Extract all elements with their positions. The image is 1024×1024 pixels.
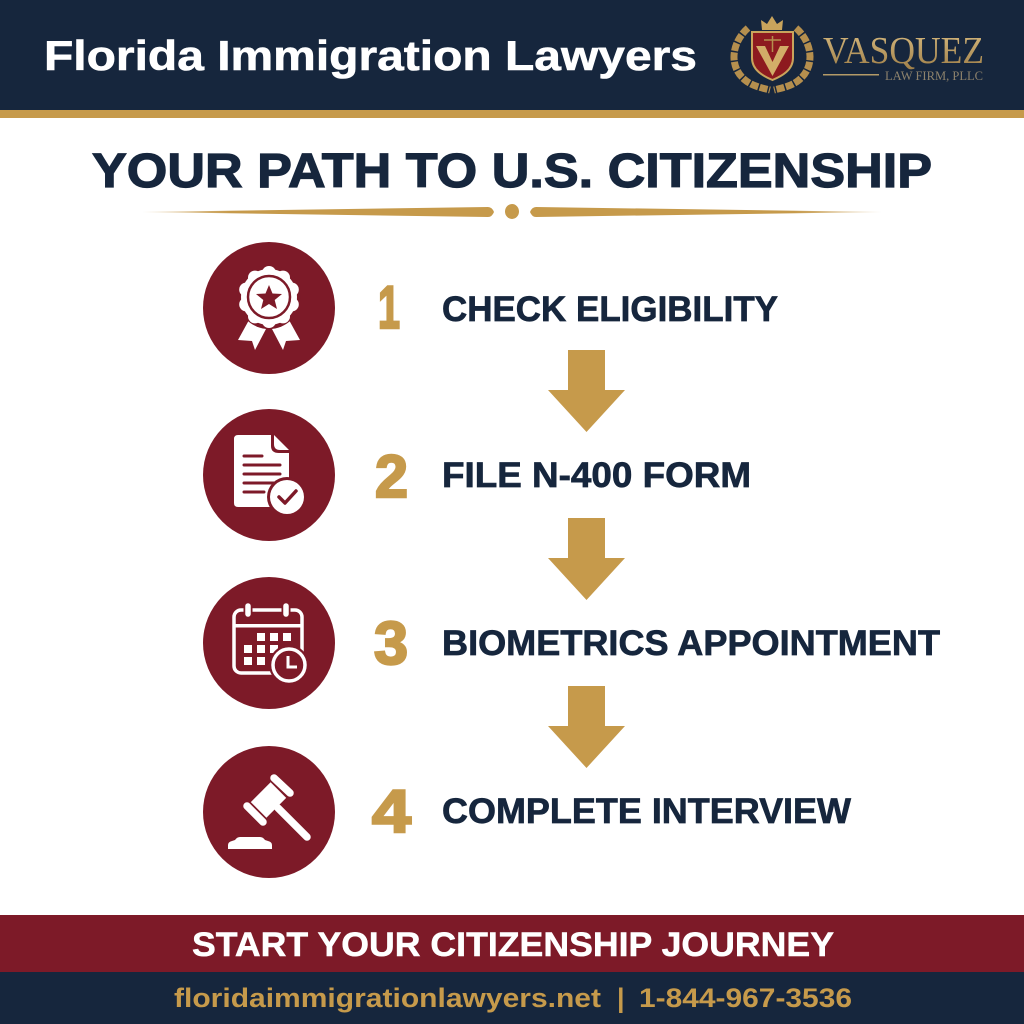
- footer band: [0, 972, 1024, 1024]
- step 2: file form: [203, 409, 751, 541]
- arrow 2 to 3: [548, 518, 625, 600]
- step label: BIOMETRICS APPOINTMENT: [442, 624, 940, 663]
- header band: [0, 0, 1024, 118]
- arrow 1 to 2: [548, 350, 625, 432]
- step number 4: 4: [372, 778, 412, 845]
- call to action text: START YOUR CITIZENSHIP JOURNEY: [192, 926, 834, 964]
- icon: shield: [752, 32, 793, 80]
- footer contact text: |: [617, 983, 625, 1013]
- step number 2: 2: [375, 443, 408, 510]
- call to action band: [0, 915, 1024, 972]
- icon: award badge: [203, 242, 335, 374]
- step 1: check eligibility: [203, 242, 778, 374]
- title divider: [142, 204, 882, 219]
- step label: CHECK ELIGIBILITY: [442, 290, 778, 329]
- step label: COMPLETE INTERVIEW: [442, 792, 851, 831]
- step 4: interview: [203, 746, 851, 878]
- step number 3: 3: [374, 610, 408, 677]
- step label: FILE N-400 FORM: [442, 456, 751, 495]
- icon: laurel wreath: [734, 28, 810, 90]
- step 3: biometrics: [203, 577, 940, 709]
- logo rule: [823, 74, 879, 76]
- arrow 3 to 4: [548, 686, 625, 768]
- icon: gavel: [203, 746, 335, 878]
- step number 1: 1: [378, 274, 400, 341]
- header title: Florida Immigration Lawyers: [44, 32, 697, 79]
- icon: document with check: [203, 409, 335, 541]
- footer contact text: floridaimmigrationlawyers.net: [174, 983, 601, 1013]
- main title: YOUR PATH TO U.S. CITIZENSHIP: [92, 145, 932, 198]
- footer contact text: [174, 983, 852, 1013]
- logo: Vasquez Law Firm: [734, 16, 984, 90]
- icon: crown: [761, 16, 783, 30]
- logo subtitle: LAW FIRM, PLLC: [885, 68, 983, 83]
- icon: calendar with clock: [203, 577, 335, 709]
- logo wordmark: VASQUEZ: [823, 30, 984, 72]
- footer contact text: 1-844-967-3536: [639, 983, 852, 1013]
